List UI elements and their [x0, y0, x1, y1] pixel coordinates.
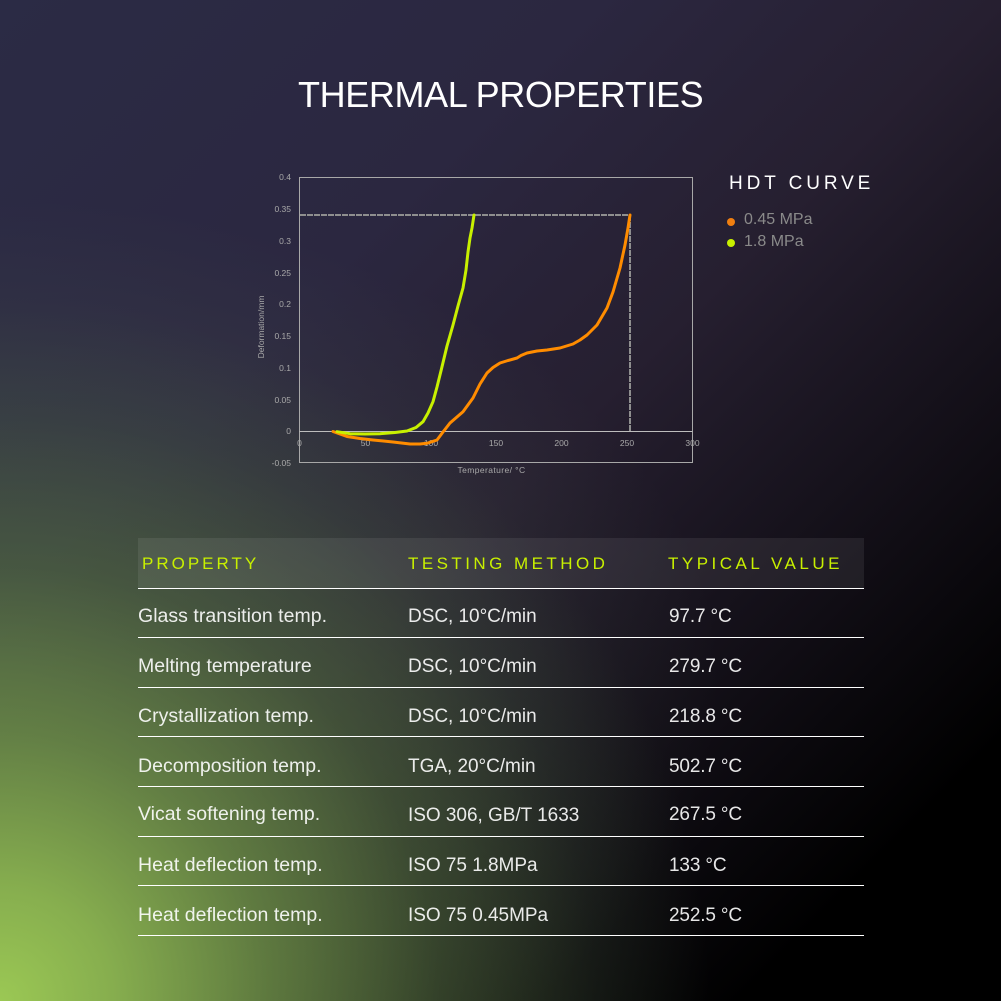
row: crystallization	[138, 688, 864, 737]
row: melting: Melting temperature	[138, 654, 312, 676]
y axis labels: 0	[286, 426, 291, 436]
y axis labels: 0.4	[279, 172, 291, 182]
y axis labels	[272, 172, 291, 468]
row: vicat: Vicat softening temp.	[138, 803, 320, 825]
chart: HDT curve	[256, 172, 700, 475]
row: melting: 279.7 °C	[669, 656, 742, 676]
curve: 0.45 MPa	[333, 215, 630, 444]
row: decomposition: 502.7 °C	[669, 756, 742, 776]
row: decomposition: Decomposition temp.	[138, 754, 322, 776]
x axis title: Temperature/ °C	[458, 465, 525, 475]
curve: 1.8 MPa	[337, 215, 474, 434]
row: glass transition	[138, 589, 864, 638]
x axis labels: 250	[620, 438, 634, 448]
plot frame	[300, 178, 692, 462]
row: vicat: 267.5 °C	[669, 804, 742, 825]
row: heat deflection 1.8 MPa: Heat deflection temp.	[138, 854, 323, 876]
y axis labels: 0.3	[279, 236, 291, 246]
row: crystallization: 218.8 °C	[669, 706, 742, 726]
row: glass transition: 97.7 °C	[669, 606, 732, 626]
title: THERMAL PROPERTIES	[298, 74, 703, 115]
row: melting	[138, 638, 864, 688]
x axis labels: 0	[297, 438, 302, 448]
row: glass transition: DSC, 10°C/min	[408, 606, 537, 626]
row: heat deflection 1.8 MPa	[138, 837, 864, 886]
x axis labels: 200	[554, 438, 569, 448]
row: heat deflection 0.45 MPa	[138, 886, 864, 936]
x axis labels: 50	[361, 438, 370, 448]
legend	[727, 173, 874, 250]
y axis title: Deformation/mm	[256, 296, 266, 358]
row: crystallization: DSC, 10°C/min	[408, 706, 537, 726]
row: vicat	[138, 787, 864, 837]
y axis labels: 0.1	[279, 363, 291, 373]
row: heat deflection 0.45 MPa: Heat deflection temp.	[138, 904, 323, 926]
x axis labels: 300	[685, 438, 700, 448]
legend item: 1.8 MPa: 1.8 MPa	[744, 233, 804, 250]
y axis labels: -0.05	[272, 458, 291, 468]
row: heat deflection 0.45 MPa: 252.5 °C	[669, 904, 742, 926]
reference lines at 0.34 mm	[300, 215, 630, 432]
x axis labels: 150	[489, 438, 503, 448]
row: decomposition	[138, 737, 864, 787]
row: vicat: ISO 306, GB/T 1633	[408, 805, 579, 826]
table header	[138, 538, 864, 589]
row: heat deflection 1.8 MPa: 133 °C	[669, 854, 726, 876]
row: heat deflection 1.8 MPa: ISO 75 1.8MPa	[408, 854, 538, 876]
y axis labels: 0.35	[274, 204, 291, 214]
table header: TESTING METHOD	[408, 554, 608, 573]
row: decomposition: TGA, 20°C/min	[408, 756, 536, 776]
row: crystallization: Crystallization temp.	[138, 704, 314, 726]
x axis labels: 100	[424, 438, 438, 448]
legend title: HDT CURVE	[729, 173, 874, 194]
y axis labels: 0.2	[279, 299, 291, 309]
row: glass transition: Glass transition temp.	[138, 604, 327, 626]
legend item: 0.45 MPa: 0.45 MPa	[744, 211, 812, 228]
table header: PROPERTY	[142, 554, 259, 573]
y axis labels: 0.25	[274, 268, 291, 278]
x axis labels	[297, 438, 700, 448]
row: heat deflection 0.45 MPa: ISO 75 0.45MPa	[408, 904, 548, 926]
y axis labels: 0.15	[274, 331, 291, 341]
row: melting: DSC, 10°C/min	[408, 656, 537, 676]
table header: TYPICAL VALUE	[668, 554, 843, 573]
y axis labels: 0.05	[274, 395, 291, 405]
